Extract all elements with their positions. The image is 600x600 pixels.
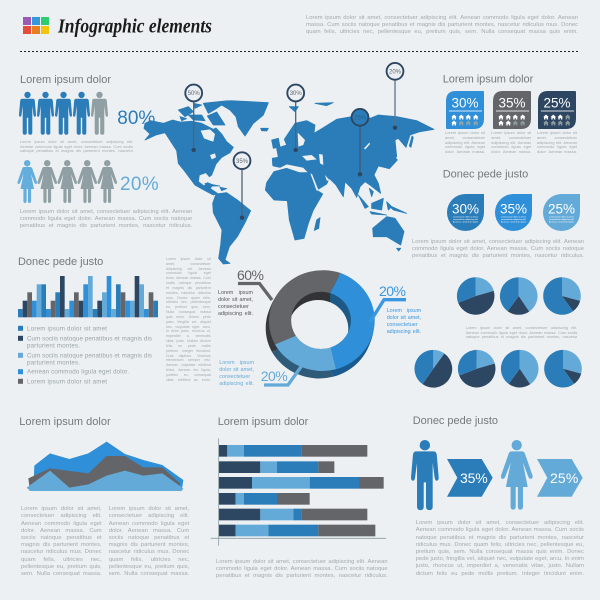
tile captions: commodo ligula eget: [537, 144, 577, 149]
panel: pie charts: [414, 277, 582, 388]
narrow text column: Cras dapibus. Vivamus: [166, 354, 211, 358]
pie: top 1: [457, 277, 494, 315]
icon row: men 80%: [19, 92, 108, 135]
badge: 30%: [447, 194, 484, 231]
text column 2: consectetuer adipiscing elit.: [109, 513, 189, 519]
heading: Lorem ipsum dolor: [20, 74, 111, 86]
narrow text column: [166, 257, 211, 385]
icon: woman: [501, 440, 533, 510]
badge: 25%: 25%: [548, 201, 575, 216]
text column 1: consectetuer adipiscing elit.: [21, 513, 102, 519]
pin: 20%: [387, 63, 403, 130]
caption: natoque penatibus et magnis dis parturient montes, nascetur: [20, 149, 133, 153]
tile captions: dolor. Aenean massa.: [445, 149, 485, 154]
body text: Lorem ipsum dolor sit amet, consectetuer adipiscing elit.: [416, 520, 584, 526]
body text: Lorem ipsum dolor sit amet, consectetuer adipiscing elit. Aenean: [20, 209, 192, 215]
narrow text column: Nulla consequat massa: [166, 310, 211, 314]
callout: 60%: adipiscing elit.: [218, 311, 253, 317]
arrow: 35%: 35%: [460, 470, 488, 486]
pie caption: natoque penatibus et magnis dis parturient montes, nascetur: [466, 335, 577, 339]
text column 2: pellentesque eu, pretium quis,: [109, 564, 189, 570]
text column 1: quam felis, ultricies nec,: [21, 557, 102, 563]
narrow text column: ultricies nec, pellentesque: [166, 300, 211, 304]
badge: 30%: consectetuer adipiscing elit.: [453, 218, 478, 221]
body text: penatibus et magnis dis parturient montes, nascetur ridiculus.: [216, 573, 388, 579]
pie: top 3: [543, 277, 581, 315]
callout: lower 20%: Lorem ipsum: [219, 360, 254, 366]
narrow text column: vitae, eleifend ac, enim.: [166, 378, 211, 382]
heading: Donec pede justo: [413, 415, 498, 427]
text column 1: magnis dis parturient montes,: [21, 542, 102, 548]
heading: Lorem ipsum dolor: [19, 416, 111, 428]
pie: top 2: [500, 277, 538, 315]
text column 2: quam felis, ultricies nec,: [109, 557, 189, 563]
body text: ridiculus mus. Donec quam felis, ultricies nec, pellentesque eu,: [416, 542, 584, 548]
callout: right 20%: Lorem ipsum: [387, 308, 421, 314]
narrow text column: mus. Donec quam felis,: [166, 296, 211, 300]
narrow text column: sociis natoque penatibus: [166, 281, 211, 285]
text column 2: sem. Nulla consequat massa.: [109, 571, 189, 577]
body text: pretium quis, sem. Nulla consequat massa quis enim. Donec: [416, 549, 584, 555]
map pins: [185, 63, 403, 220]
callout: right 20%: adipiscing elit.: [387, 329, 421, 335]
tile: 35%: 35%: [498, 96, 526, 111]
caption: Lorem ipsum dolor sit amet, consectetuer adipiscing elit.: [20, 140, 133, 144]
narrow text column: pretium. Integer tincidunt.: [166, 349, 211, 353]
text column 1: nascetur ridiculus mus. Donec: [21, 549, 102, 555]
tile captions: dolor. Aenean massa.: [537, 149, 577, 154]
heading: Lorem ipsum dolor: [218, 416, 309, 428]
world map: [144, 101, 434, 264]
narrow text column: Lorem ipsum dolor sit: [166, 257, 211, 261]
callout: right 20%: consectetuer: [387, 322, 418, 328]
pie: bottom 3: [501, 350, 539, 387]
body text: [416, 520, 584, 580]
title: Infographic elements: [57, 16, 212, 38]
narrow text column: amet, consectetuer: [166, 262, 211, 266]
badge: 35%: consectetuer adipiscing elit.: [501, 218, 526, 221]
body text: natoque penatibus et magnis dis parturient montes, nascetur: [416, 535, 584, 541]
narrow text column: felis eu pede mollis: [166, 344, 211, 348]
icon: colour grid logo: [23, 17, 49, 34]
pie: bottom 1: [414, 350, 452, 388]
badge: 35%: 35%: [500, 201, 527, 216]
panel: people percentages: [17, 74, 192, 232]
text column 2: [109, 506, 189, 580]
body text: commodo ligula eget dolor. Aenean massa. Cum sociis natoque: [20, 216, 192, 222]
text column 2: magnis dis parturient montes,: [109, 542, 189, 548]
callout: 60%: [218, 267, 272, 320]
pin: 50%: 50%: [188, 91, 200, 97]
body text: dictum felis eu pede mollis pretium. Integer tincidunt enim.: [416, 571, 584, 577]
tile captions: amet, consectetuer: [537, 135, 577, 140]
pin: 25%: 25%: [354, 116, 367, 122]
narrow text column: adipiscing elit. Aenean: [166, 267, 211, 271]
callout: right 20%: dolor sit amet,: [387, 315, 421, 321]
intro text: massa. Cum sociis natoque penatibus et magnis dis parturient montes, nascetur ridiculus mus. Donec: [306, 22, 578, 28]
heading: Donec pede justo: [18, 256, 103, 268]
header: [23, 14, 578, 38]
stacked bar chart: [211, 438, 386, 546]
callout: lower 20%: [219, 360, 303, 390]
badge: 25%: Aenean commodo ligula: [549, 220, 575, 224]
badge: 35%: Lorem ipsum dolor sit amet,: [501, 216, 526, 218]
callout: lower 20%: adipiscing elit.: [219, 381, 254, 387]
heading: Donec pede justo: [443, 169, 528, 181]
panel: stacked bars: [211, 416, 388, 582]
icon row: women 20%: [17, 160, 117, 203]
donut: [266, 270, 375, 378]
tile captions: amet, consectetuer: [491, 135, 531, 140]
callout: lower 20%: consectetuer: [219, 374, 250, 380]
arrow: 25%: [537, 459, 583, 497]
tile captions: adipiscing elit. Aenean: [537, 140, 577, 145]
callout: lower 20%: 20%: [261, 368, 288, 384]
legend: Lorem ipsum dolor sit amet: [27, 326, 107, 333]
badge: 35%: [495, 194, 532, 231]
text column 1: sem. Nulla consequat massa.: [21, 571, 102, 577]
narrow text column: In enim justo, rhoncus ut,: [166, 329, 211, 333]
pie caption: [466, 326, 577, 341]
body text: penatibus et magnis dis parturient montes, nascetur ridiculus.: [412, 253, 584, 259]
text column 1: pellentesque eu, pretium quis,: [21, 564, 102, 570]
narrow text column: nec, vulputate eget, arcu.: [166, 325, 211, 329]
callout: lower 20%: dolor sit amet,: [219, 367, 254, 373]
body text: [20, 209, 192, 232]
stat: 20%: 20%: [120, 174, 159, 195]
tile captions: amet, consectetuer: [445, 135, 485, 140]
text column 2: Lorem ipsum dolor sit amet,: [109, 506, 189, 512]
badge: 30%: 30%: [452, 201, 479, 216]
panel: area chart: [19, 416, 189, 580]
body text: Aenean commodo ligula eget dolor. Aenean massa. Cum sociis: [416, 527, 584, 533]
text column 1: Aenean commodo ligula eget: [21, 521, 102, 527]
pie caption: Aenean commodo ligula eget dolor. Aenean massa. Cum sociis: [466, 331, 577, 335]
legend: Cum sociis natoque penatibus et magnis dis: [27, 353, 152, 360]
text column 2: nascetur ridiculus mus. Donec: [109, 549, 189, 555]
narrow text column: vitae, justo. Nullam dictum: [166, 339, 211, 343]
callout: 60%: dolor sit amet,: [218, 297, 253, 303]
legend: [18, 326, 152, 385]
pin: 30%: [287, 85, 304, 152]
area chart: [27, 442, 183, 491]
badge: 25%: Lorem ipsum dolor sit amet,: [549, 216, 574, 218]
badge: 25%: consectetuer adipiscing elit.: [549, 218, 574, 221]
text column 2: sociis natoque penatibus et: [109, 535, 189, 541]
text column 2: dolor. Aenean massa. Cum: [109, 528, 189, 534]
pin: 35%: [234, 152, 250, 220]
callout: right 20%: 20%: [379, 283, 406, 299]
tile captions: adipiscing elit. Aenean: [445, 140, 485, 145]
tile captions: commodo ligula eget: [491, 144, 531, 149]
badge: 30%: Aenean commodo ligula: [453, 220, 479, 224]
callout: 60%: Lorem ipsum: [218, 290, 253, 296]
body text: pede justo, fringilla vel, aliquet nec, vulputate eget, arcu. In enim: [416, 556, 584, 562]
pie: bottom 4: [544, 350, 582, 388]
text column 1: dolor. Aenean massa. Cum: [21, 528, 102, 534]
badge: 35%: Aenean commodo ligula: [501, 220, 527, 224]
arrow: 25%: 25%: [550, 470, 578, 486]
pin: 35%: 35%: [236, 159, 249, 165]
body text: commodo ligula eget dolor. Aenean massa. Cum sociis natoque: [216, 566, 388, 572]
caption: Aenean commodo ligula eget dolor. Aenean massa. Cum sociis: [20, 145, 133, 149]
intro text: Lorem ipsum dolor sit amet, consectetuer adipiscing elit. Aenean commodo ligula eget dolor. Aenean: [306, 14, 578, 20]
stat: 80%: 80%: [117, 108, 155, 129]
narrow text column: elementum semper nisi.: [166, 358, 211, 362]
pin: 30%: 30%: [290, 91, 302, 97]
narrow text column: justo, fringilla vel, aliquet: [166, 320, 211, 324]
tile captions: [445, 131, 577, 156]
body text: [216, 558, 388, 582]
body text: Lorem ipsum dolor sit amet, consectetuer adipiscing elit. Aenean: [412, 239, 584, 245]
legend: Aenean commodo ligula eget dolor.: [27, 369, 129, 376]
body text: penatibus et magnis dis parturient montes, nascetur ridiculus.: [20, 223, 192, 229]
text column 1: sociis natoque penatibus et: [21, 535, 102, 541]
narrow text column: et magnis dis parturient: [166, 286, 211, 290]
body text: justo, rhoncus ut, imperdiet a, venenatis vitae, justo. Nullam: [416, 563, 584, 569]
panel: house tiles: [443, 74, 577, 156]
narrow text column: Aenean vulputate eleifend: [166, 363, 211, 367]
legend: Lorem ipsum dolor sit amet: [27, 378, 107, 385]
intro text: quam felis, ultricies nec, pellentesque eu, pretium quis, sem. Nulla consequat massa quis enim.: [306, 29, 578, 35]
tile captions: commodo ligula eget: [445, 144, 485, 149]
body text: Lorem ipsum dolor sit amet, consectetuer adipiscing elit. Aenean: [216, 558, 388, 564]
narrow text column: montes, nascetur ridiculus: [166, 291, 211, 295]
callout: 60%: consectetuer: [218, 304, 249, 310]
pin: 20%: 20%: [389, 70, 402, 76]
narrow text column: porttitor eu, consequat: [166, 373, 211, 377]
intro text: [306, 14, 578, 38]
callout: 60%: 60%: [237, 267, 264, 283]
narrow text column: tellus. Aenean leo ligula,: [166, 368, 211, 372]
narrow text column: dolor. Aenean massa. Cum: [166, 276, 211, 280]
callout: right 20%: [370, 283, 421, 338]
legend: parturient montes.: [27, 360, 80, 367]
narrow text column: commodo ligula eget: [166, 271, 211, 275]
panel: drop badges: [412, 169, 584, 262]
pie: bottom 2: [458, 350, 495, 387]
legend: Cum sociis natoque penatibus et magnis dis: [27, 336, 152, 343]
body text: commodo ligula eget dolor. Aenean massa. Cum sociis natoque: [412, 246, 584, 252]
tile: 25%: 25%: [543, 96, 571, 111]
caption: [20, 140, 133, 155]
text column 2: Aenean commodo ligula eget: [109, 521, 189, 527]
bar chart: [18, 276, 158, 317]
arrow: 35%: [447, 459, 493, 497]
narrow text column: imperdiet a, venenatis: [166, 334, 211, 338]
heading: Lorem ipsum dolor: [443, 74, 534, 86]
legend: parturient montes.: [27, 343, 80, 350]
pin: 25%: [352, 109, 368, 176]
tile: 30%: 30%: [451, 96, 479, 111]
panel: donut chart: [218, 267, 421, 390]
badge: 25%: [543, 194, 580, 231]
badge: 30%: Lorem ipsum dolor sit amet,: [453, 216, 478, 218]
narrow text column: eu, pretium quis, sem.: [166, 305, 211, 309]
narrow text column: quis enim. Donec pede: [166, 315, 211, 319]
panel: gender shares: [411, 415, 584, 580]
pin: 50%: [185, 85, 202, 152]
pie caption: Lorem ipsum dolor sit amet, consectetuer adipiscing elit.: [466, 326, 577, 330]
icon: man: [411, 440, 439, 510]
tile captions: dolor. Aenean massa.: [491, 149, 531, 154]
text column 1: Lorem ipsum dolor sit amet,: [21, 506, 102, 512]
tile captions: adipiscing elit. Aenean: [491, 140, 531, 145]
body text: [412, 239, 584, 262]
panel: column chart: [18, 256, 158, 385]
text column 1: [21, 506, 102, 580]
